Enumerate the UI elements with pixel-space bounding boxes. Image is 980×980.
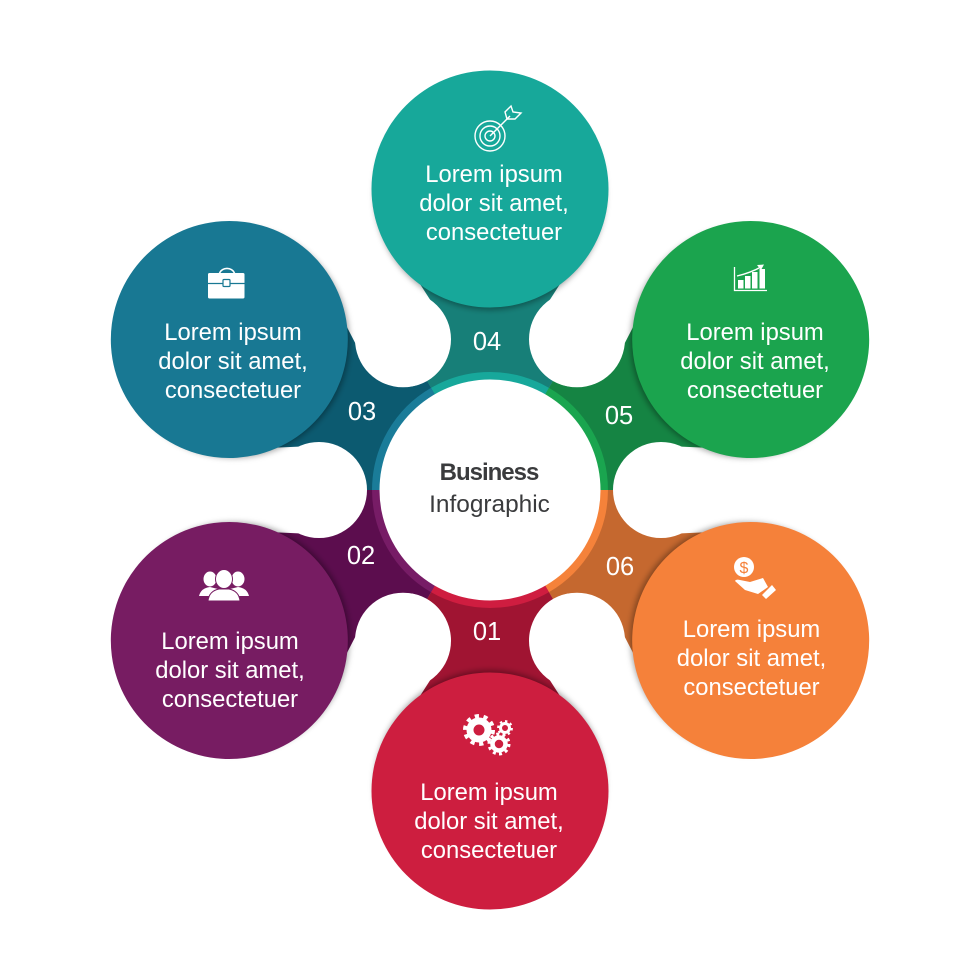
ring segment 05 — [547, 384, 617, 490]
ring segment 03 — [363, 384, 433, 490]
icon: hand holding coin: $ — [740, 560, 749, 577]
text 01: dolor sit amet, — [414, 808, 564, 835]
text 05: consectetuer — [687, 377, 823, 404]
shadow 03 — [75, 184, 392, 500]
shadow 06 — [588, 480, 905, 796]
number 01: 01 — [473, 618, 501, 646]
text 02: Lorem ipsum — [161, 628, 299, 655]
text 01: Lorem ipsum — [420, 779, 558, 806]
icon: target with arrow — [475, 106, 521, 151]
text 06: consectetuer — [683, 674, 820, 701]
panel: step 03 — [67, 178, 433, 501]
icon: growth chart — [734, 264, 767, 290]
ring segment 02 — [363, 490, 433, 596]
circle 04 — [372, 70, 608, 308]
icon: people — [199, 570, 249, 601]
circle 03 — [67, 178, 391, 501]
number 05: 05 — [605, 402, 633, 430]
subheading: Infographic: Infographic — [429, 491, 550, 518]
ring segment 04 — [433, 376, 547, 391]
text 03: Lorem ipsum — [164, 319, 302, 346]
ring segment 06 — [547, 490, 617, 596]
shadow 05 — [588, 184, 905, 500]
icon: briefcase — [208, 268, 244, 298]
circle 02 — [67, 479, 391, 802]
panel: centre — [380, 380, 600, 600]
text 05: dolor sit amet, — [680, 348, 830, 375]
text 03: dolor sit amet, — [158, 348, 308, 375]
text 02: dolor sit amet, — [155, 657, 305, 684]
number 04: 04 — [473, 328, 501, 356]
heading: Business: Business — [440, 459, 539, 486]
text 04: dolor sit amet, — [419, 190, 569, 217]
connectors between centre and circles — [260, 265, 720, 715]
text 01: consectetuer — [421, 837, 557, 864]
text 06: dolor sit amet, — [677, 645, 826, 672]
text 04: Lorem ipsum — [425, 161, 563, 188]
ring segment 01 — [433, 589, 547, 604]
number 06: 06 — [606, 553, 634, 581]
text 03: consectetuer — [165, 377, 301, 404]
number 02: 02 — [347, 542, 375, 570]
panel: step 05 — [547, 178, 913, 501]
white gaps between connectors — [271, 291, 709, 689]
icon: gears — [465, 716, 512, 754]
panel: step 02 — [67, 479, 433, 802]
panel: step 06 — [547, 479, 913, 802]
circle 06 — [589, 479, 913, 802]
shadow 02 — [75, 480, 392, 796]
text 02: consectetuer — [162, 686, 298, 713]
panel: step 04 — [372, 70, 608, 391]
panel: step 01 — [372, 589, 608, 910]
text 06: Lorem ipsum — [683, 616, 820, 643]
shadow 04 — [374, 78, 606, 310]
text 04: consectetuer — [426, 219, 562, 246]
number 03: 03 — [348, 398, 376, 426]
centre white circle — [380, 380, 600, 600]
circle 05 — [589, 178, 913, 501]
shadow 01 — [374, 670, 606, 902]
circle 01 — [372, 672, 608, 910]
icon: hand holding coin — [734, 557, 776, 599]
text 05: Lorem ipsum — [686, 319, 824, 346]
